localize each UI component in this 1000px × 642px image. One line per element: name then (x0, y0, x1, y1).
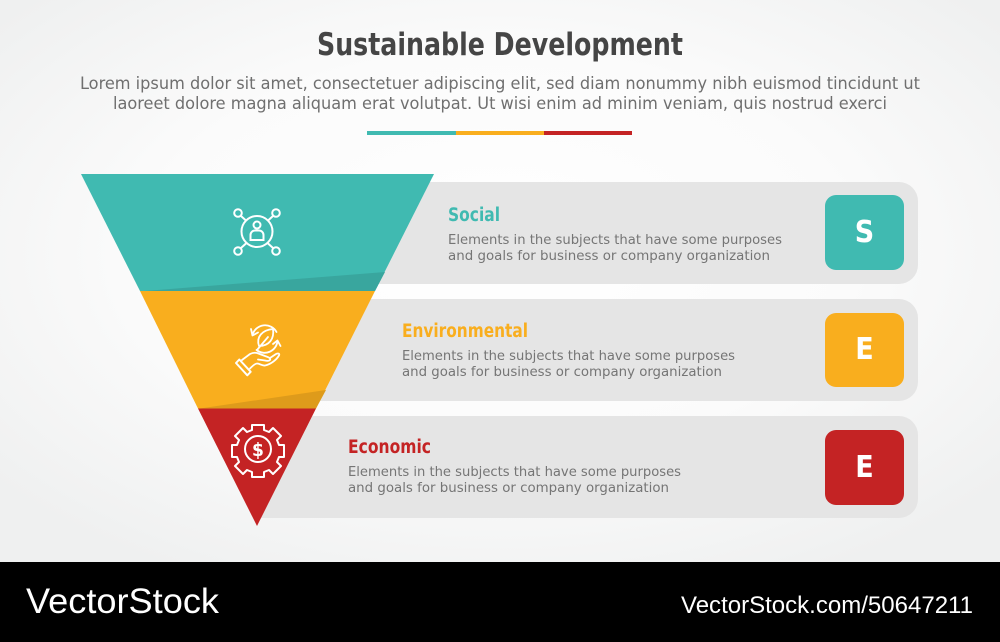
footer url: VectorStock.com/50647211 (681, 592, 973, 619)
intro text (80, 74, 920, 113)
text block: social description: and goals for business or company organization (448, 248, 770, 264)
text block: economic description: Elements in the subjects that have some purposes (348, 464, 681, 480)
funnel segment: social (81, 174, 434, 291)
title: Sustainable Development (317, 27, 683, 63)
intro text: Lorem ipsum dolor sit amet, consectetuer adipiscing elit, sed diam nonummy nibh euismod tincidunt ut (80, 74, 920, 93)
badge: E environmental: E (855, 332, 874, 367)
title divider (367, 131, 632, 135)
icon: gear with dollar (232, 425, 284, 477)
heading: economic: Economic (348, 437, 431, 458)
text block: economic description (348, 464, 681, 496)
badge: S (825, 195, 904, 270)
text block: environmental description (402, 348, 735, 380)
icon: hand holding leaf (236, 325, 280, 375)
text block: social description: Elements in the subjects that have some purposes (448, 232, 782, 248)
badge: E environmental (825, 313, 904, 387)
text block: social description (448, 232, 782, 264)
panel: environmental row (320, 299, 918, 401)
badge: S: S (855, 215, 874, 250)
footer bar (0, 562, 1000, 642)
funnel segment: economic (198, 408, 316, 526)
panel: economic row (260, 416, 918, 518)
heading: social: Social (448, 205, 500, 226)
heading: environmental: Environmental (402, 321, 528, 342)
icon: gear with dollar: $ (252, 439, 264, 461)
text block: environmental description: and goals for business or company organization (402, 364, 722, 380)
text block: economic description: and goals for business or company organization (348, 480, 669, 496)
badge: E economic: E (855, 450, 874, 485)
badge: E economic (825, 430, 904, 505)
footer logo text: VectorStock (26, 582, 220, 621)
text block: environmental description: Elements in the subjects that have some purposes (402, 348, 735, 364)
funnel segment: environmental (140, 291, 375, 408)
icon: social network person (234, 209, 280, 255)
panel: social row (370, 182, 918, 284)
intro text: laoreet dolore magna aliquam erat volutpat. Ut wisi enim ad minim veniam, quis nostrud exerci (113, 94, 887, 113)
